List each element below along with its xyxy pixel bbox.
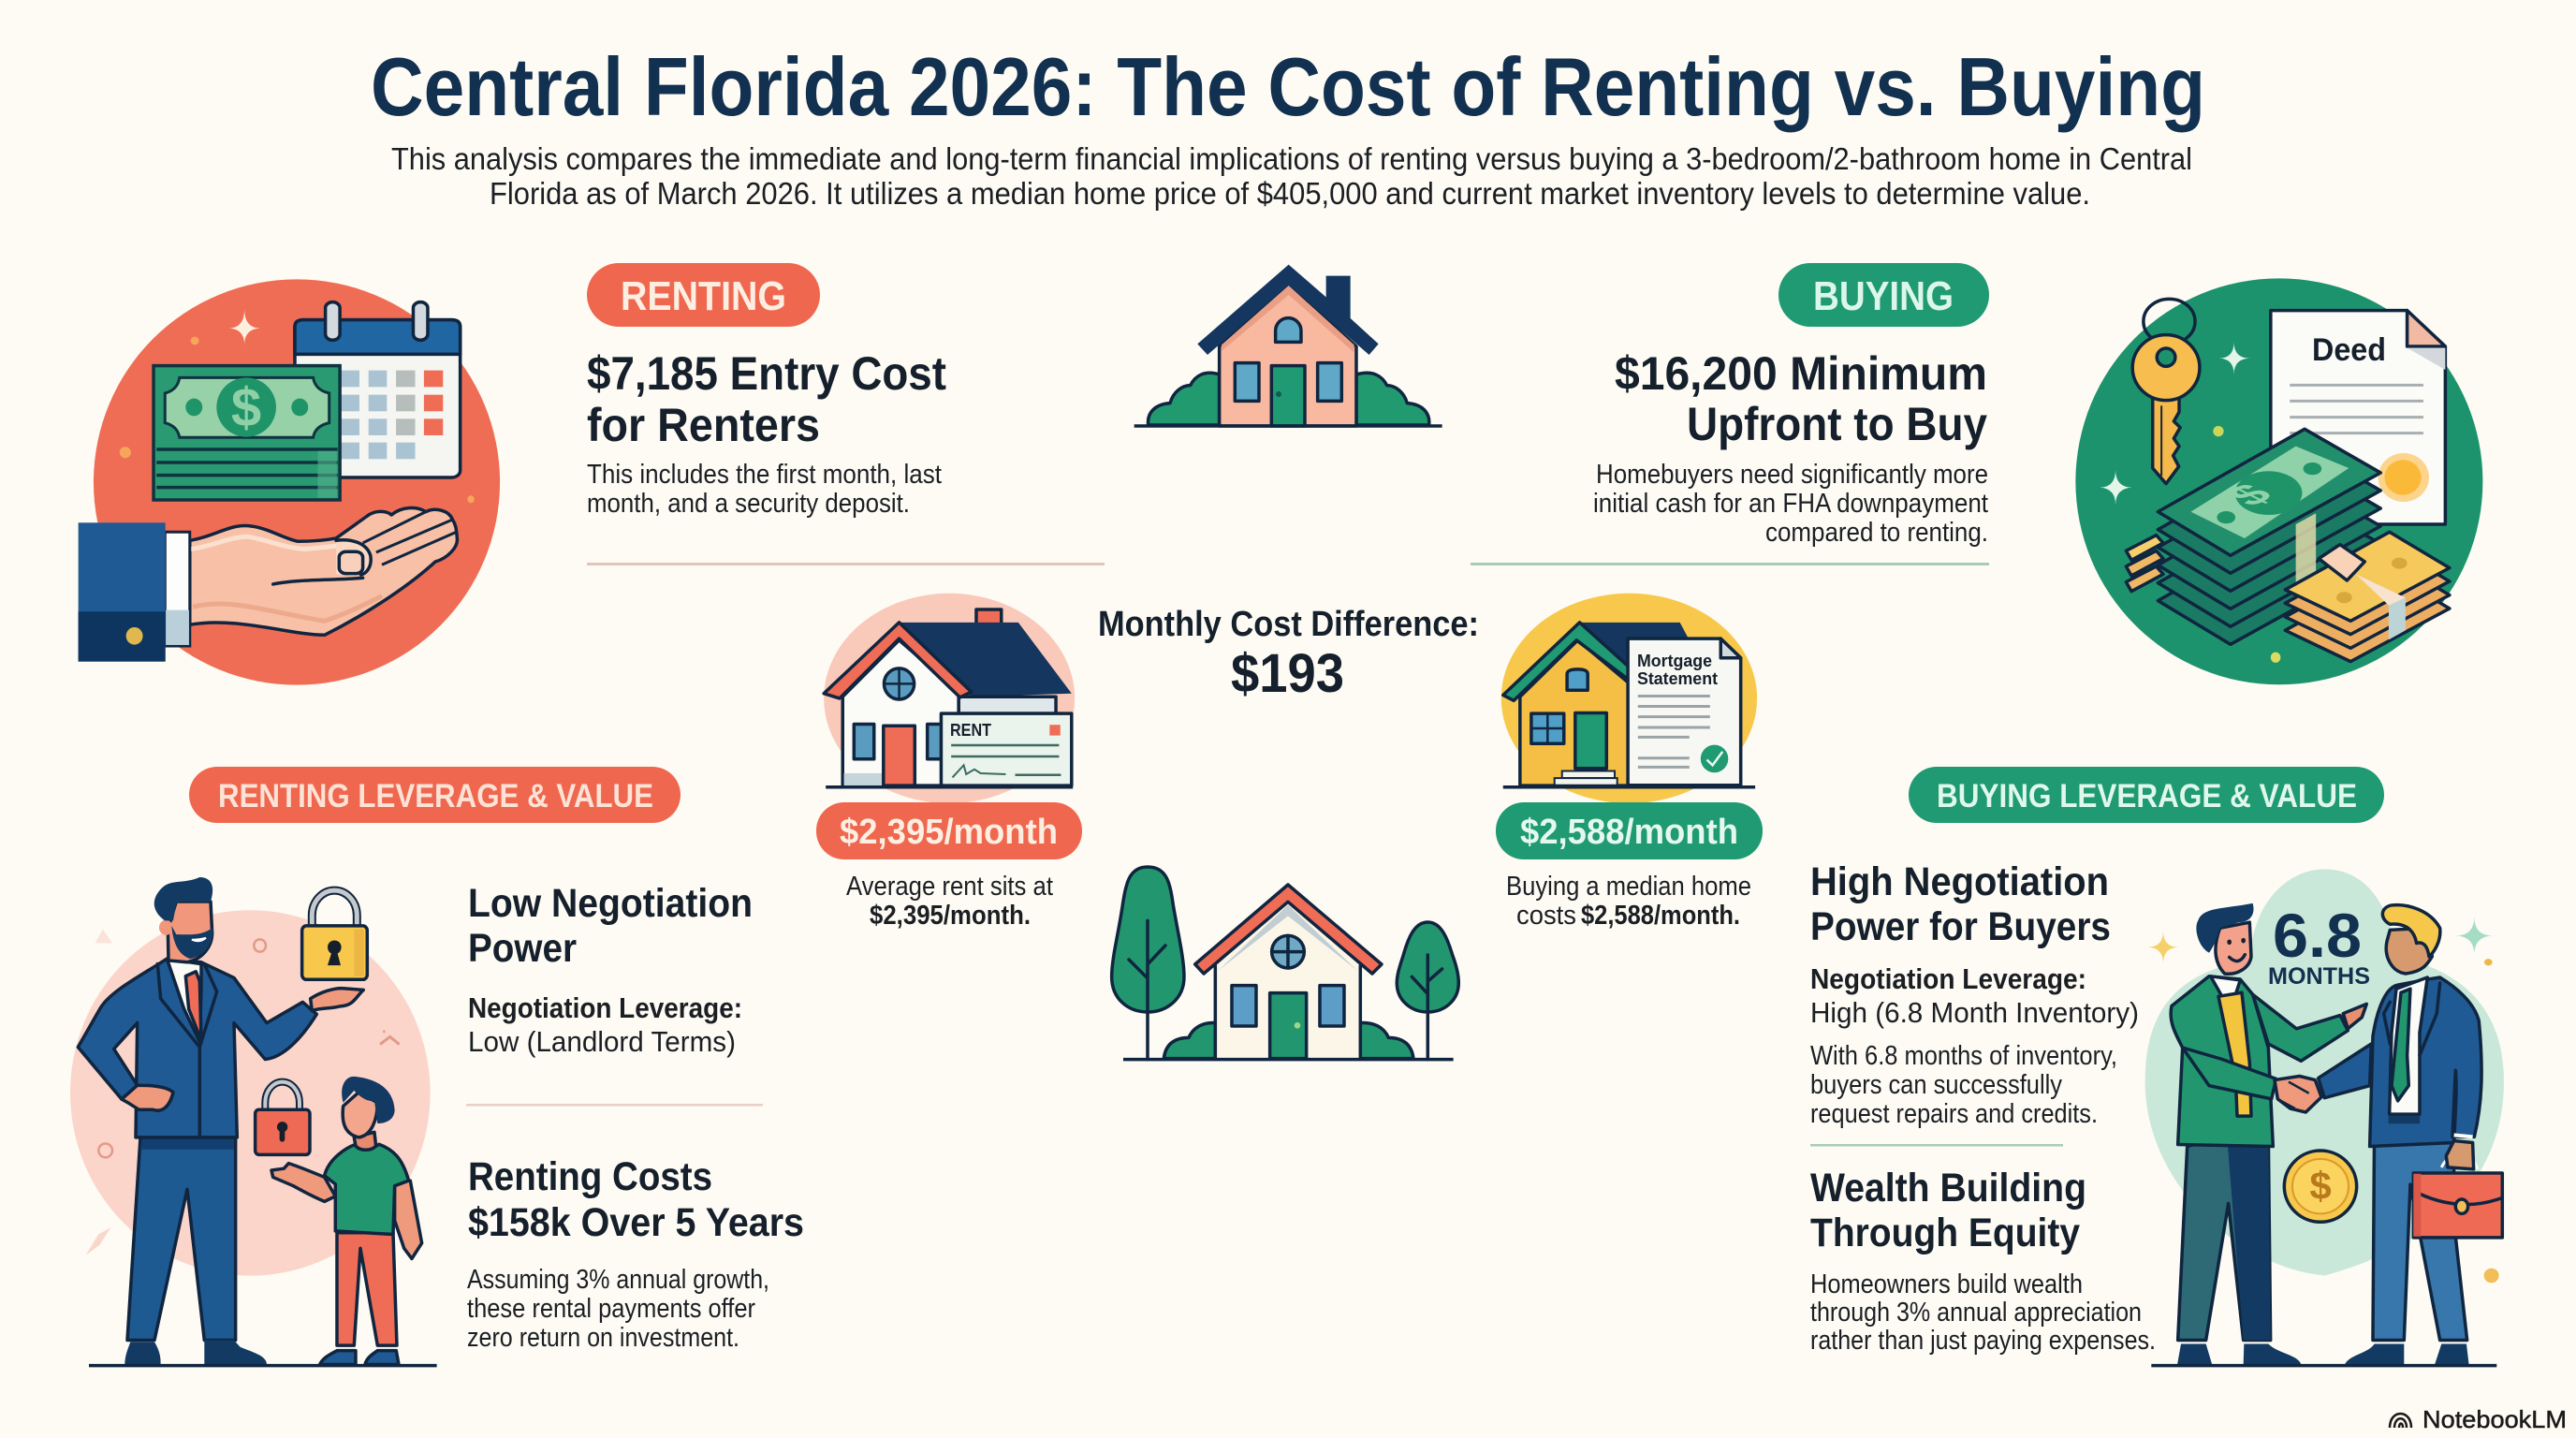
text: buyer upfront description: initial cash for an FHA downpayment	[1593, 489, 1988, 519]
text: renter entry description	[587, 460, 942, 519]
text: inventory description: request repairs and credits.	[1810, 1099, 2098, 1129]
callout: monthly cost difference: Monthly Cost Difference:	[1098, 605, 1479, 644]
icon: house with trees	[1112, 867, 1458, 1060]
heading: buyer upfront cost: $16,200 Minimum	[1615, 347, 1987, 400]
panel: renting leverage text	[467, 881, 804, 1353]
heading: buyer upfront cost	[1615, 347, 1987, 450]
text: negotiation leverage high	[1810, 962, 2139, 1029]
panel: renting entry cost	[587, 263, 946, 519]
text: equity description: rather than just paying expenses.	[1810, 1326, 2156, 1356]
subtitle intro text: This analysis compares the immediate and long-term financial implications of renting versus buying a 3-bedroom/2-bathroom home in Central	[391, 141, 2192, 176]
text: rental return description: Assuming 3% annual growth,	[467, 1265, 769, 1295]
panel: buying leverage text	[1810, 859, 2156, 1356]
icon: key, deed and cash stacks	[2075, 278, 2482, 684]
icon: central house with chimney	[1134, 265, 1442, 426]
heading: buyer upfront cost: Upfront to Buy	[1687, 398, 1987, 450]
badge: buying leverage and value	[1909, 767, 2384, 823]
badge: mortgage price: $2,588/month	[1520, 813, 1738, 852]
icon: rental house with rent check: RENT	[950, 721, 991, 740]
heading: wealth building through equity: Through Equity	[1810, 1211, 2080, 1255]
logo: NotebookLM: NotebookLM	[2422, 1405, 2567, 1433]
heading: renting costs over 5 years: $158k Over 5 Years	[468, 1200, 804, 1245]
heading: low negotiation power: Low Negotiation	[468, 881, 753, 926]
text: rental return description: zero return on investment.	[467, 1323, 739, 1353]
badge: buying	[1778, 263, 1989, 327]
text: inventory description: With 6.8 months of inventory,	[1810, 1041, 2117, 1071]
heading: high negotiation power: High Negotiation	[1810, 859, 2109, 904]
icon: landlord and tenant with locks	[70, 877, 437, 1366]
text: equity description: Homeowners build wealth	[1810, 1269, 2083, 1299]
heading: renting costs over 5 years: Renting Costs	[468, 1154, 712, 1199]
text: negotiation leverage high: High (6.8 Month Inventory)	[1810, 996, 2139, 1029]
text: average rent	[846, 872, 1053, 931]
icon: rental house with rent check	[824, 594, 1075, 803]
icon: buyer and seller handshake with 6.8 months: $	[2309, 1164, 2332, 1208]
heading: renting costs over 5 years	[468, 1154, 804, 1245]
badge: renting	[587, 263, 820, 327]
icon: buyer and seller handshake with 6.8 months	[2145, 869, 2504, 1366]
text: renter entry description: month, and a security deposit.	[587, 489, 910, 519]
icon: hand holding cash and calendar: $	[231, 377, 261, 438]
text: negotiation leverage low: Negotiation Leverage:	[468, 991, 742, 1024]
badge: rent price: $2,395/month	[840, 813, 1058, 852]
text: buyer upfront description: compared to renting.	[1765, 518, 1988, 548]
text: median home cost: Buying a median home	[1506, 872, 1751, 902]
heading: renter entry cost: $7,185 Entry Cost	[587, 347, 946, 400]
badge: buying: BUYING	[1813, 273, 1954, 319]
text: equity description: through 3% annual appreciation	[1810, 1298, 2142, 1328]
heading: wealth building through equity	[1810, 1166, 2086, 1255]
text: rental return description: these rental payments offer	[467, 1294, 755, 1324]
heading: high negotiation power: Power for Buyers	[1810, 904, 2111, 949]
text: equity description	[1810, 1269, 2156, 1356]
text: rental return description	[467, 1265, 769, 1353]
text: renter entry description: This includes the first month, last	[587, 460, 942, 490]
badge: renting leverage and value: RENTING LEVERAGE & VALUE	[218, 778, 653, 814]
subtitle intro text: Florida as of March 2026. It utilizes a median home price of $405,000 and current market inventory levels to determine value.	[490, 176, 2090, 211]
heading: renter entry cost: for Renters	[587, 399, 820, 451]
text: negotiation leverage low: Low (Landlord Terms)	[468, 1025, 736, 1058]
heading: low negotiation power: Power	[468, 926, 577, 971]
text: median home cost	[1506, 872, 1751, 931]
icon: house with mortgage statement: Mortgage	[1637, 652, 1712, 670]
heading: renter entry cost	[587, 347, 946, 451]
heading: high negotiation power	[1810, 859, 2111, 949]
callout: monthly cost difference	[1098, 605, 1479, 704]
callout: monthly cost difference: $193	[1231, 643, 1344, 704]
title: Central Florida 2026: The Cost of Renting vs. Buying	[371, 40, 2205, 133]
text: buyer upfront description: Homebuyers need significantly more	[1596, 460, 1988, 490]
text: average rent: $2,395/month.	[870, 901, 1031, 931]
text: buyer upfront description	[1593, 460, 1988, 548]
badge: renting: RENTING	[621, 273, 786, 319]
heading: low negotiation power	[468, 881, 753, 971]
icon: buyer and seller handshake with 6.8 months: 6.8	[2273, 901, 2362, 970]
subtitle intro text	[391, 141, 2192, 211]
icon: buyer and seller handshake with 6.8 months: MONTHS	[2268, 963, 2370, 990]
badge: buying leverage and value: BUYING LEVERAGE & VALUE	[1937, 778, 2357, 814]
heading: wealth building through equity: Wealth Building	[1810, 1166, 2086, 1211]
badge: renting leverage and value	[189, 767, 681, 823]
text: median home cost: costs	[1516, 901, 1576, 931]
text: inventory description: buyers can successfully	[1810, 1070, 2062, 1100]
badge: rent price	[816, 802, 1082, 859]
badge: mortgage price	[1496, 802, 1763, 859]
text: negotiation leverage low	[468, 991, 742, 1058]
icon: house with mortgage statement: Statement	[1637, 669, 1718, 688]
text: average rent: Average rent sits at	[846, 872, 1053, 902]
text: inventory description	[1810, 1041, 2117, 1129]
panel: buying upfront cost	[1593, 263, 1989, 548]
icon: house with mortgage statement	[1501, 594, 1757, 803]
icon: key, deed and cash stacks: $	[2216, 477, 2284, 512]
icon: key, deed and cash stacks: Deed	[2312, 332, 2386, 368]
text: median home cost: $2,588/month.	[1581, 901, 1740, 931]
icon: hand holding cash and calendar	[79, 279, 500, 685]
text: negotiation leverage high: Negotiation Leverage:	[1810, 962, 2086, 995]
